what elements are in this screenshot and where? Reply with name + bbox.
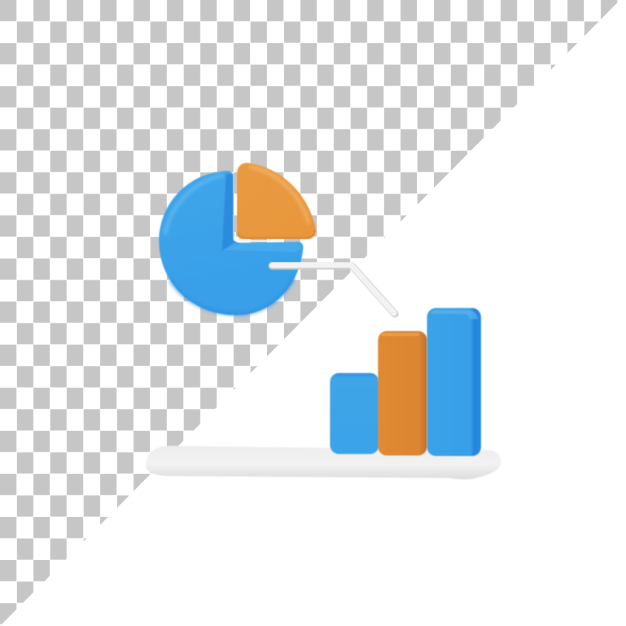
blue short bar [330, 373, 379, 454]
blue pie slice [159, 171, 303, 315]
bar chart [330, 308, 481, 456]
arrow connector [272, 265, 395, 314]
shelf base [146, 446, 501, 479]
pie chart [159, 163, 316, 315]
orange pie slice [237, 163, 316, 239]
white gap [235, 232, 270, 241]
pie inner shading [222, 174, 240, 250]
blue tall bar [427, 308, 481, 456]
orange middle bar [378, 331, 427, 456]
